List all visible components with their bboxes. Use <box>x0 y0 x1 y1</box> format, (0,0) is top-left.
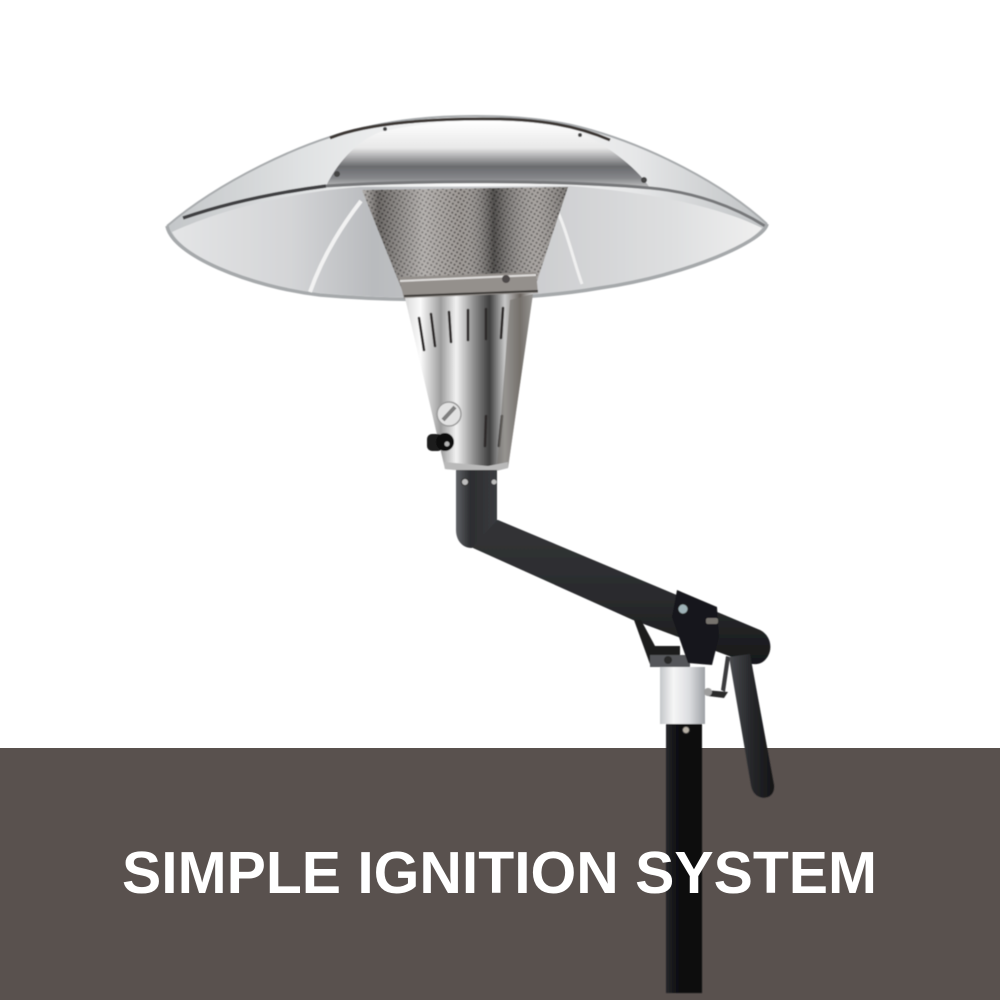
heater reflector shade <box>167 116 767 300</box>
mesh burner cone <box>362 187 568 299</box>
lower pole <box>666 722 702 993</box>
stainless lower cone <box>405 293 533 473</box>
band: bottom caption background <box>0 748 1000 1000</box>
lever handle <box>729 654 774 798</box>
angled support arm <box>456 470 770 664</box>
title: caption text: SIMPLE IGNITION SYSTEM <box>122 840 877 906</box>
ignition dial <box>437 402 461 426</box>
ignition push button <box>427 433 454 451</box>
pole screw <box>682 726 690 734</box>
silver collar <box>660 667 705 724</box>
icon: patio heater photo illustration <box>167 116 774 993</box>
hinge bracket <box>634 590 730 698</box>
